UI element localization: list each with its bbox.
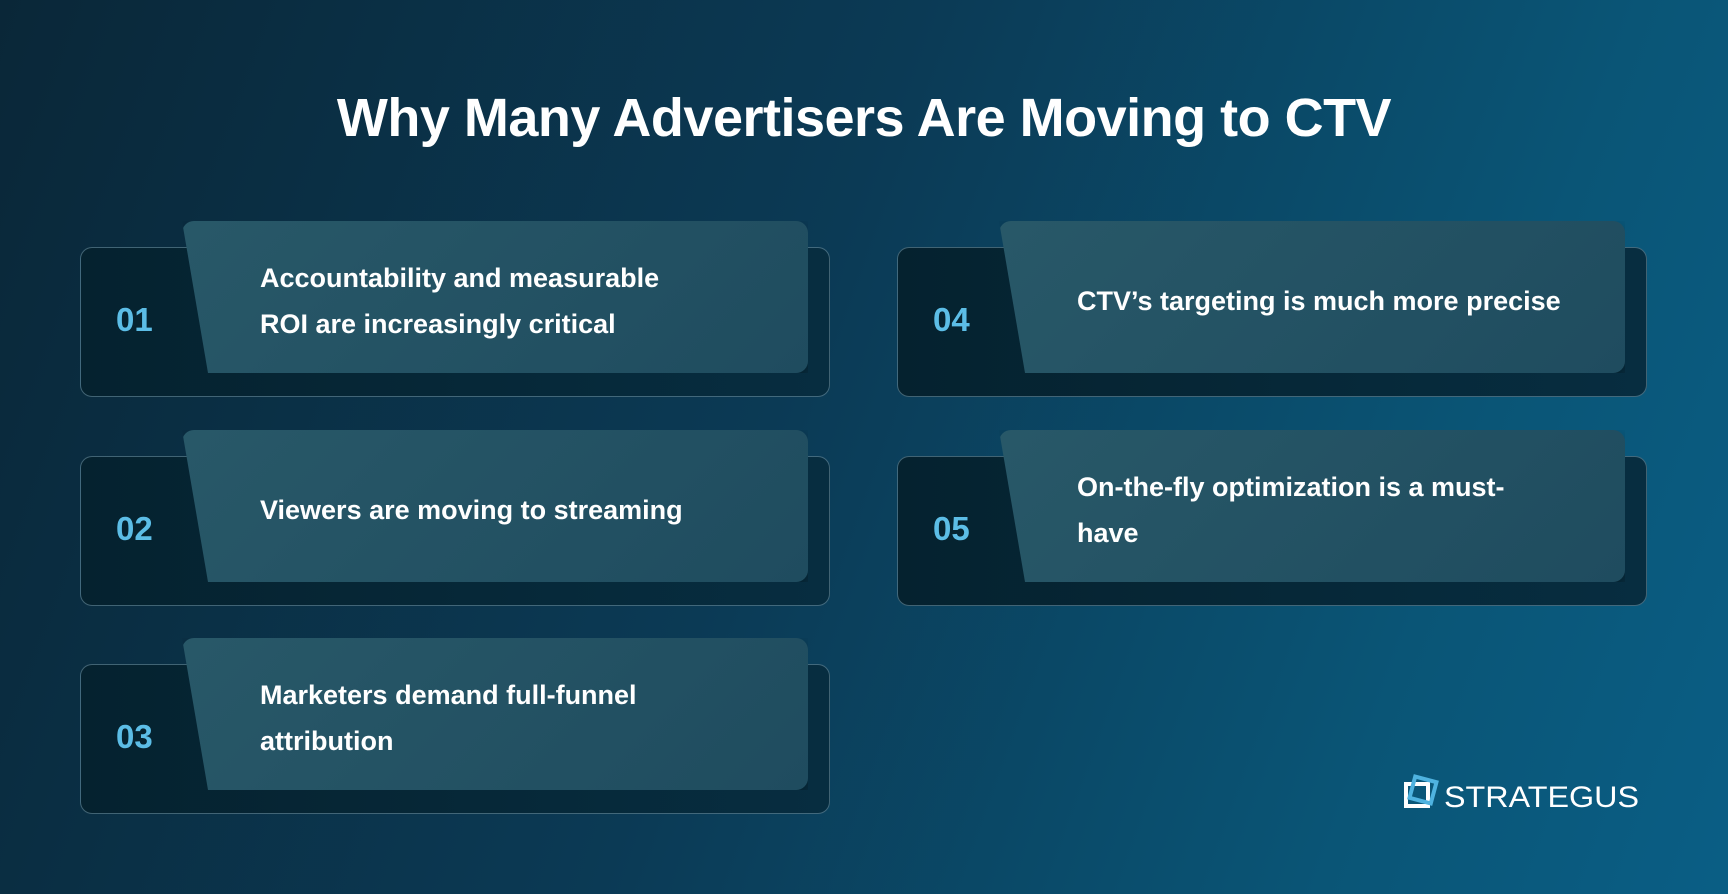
card 04: 04 xyxy=(933,301,970,338)
card 04 xyxy=(897,221,1647,397)
card 01: ROI are increasingly critical xyxy=(260,309,616,339)
title: Why Many Advertisers Are Moving to CTV xyxy=(337,88,1391,148)
card 05: have xyxy=(1077,518,1139,548)
logo: STRATEGUS xyxy=(1444,781,1639,814)
card 05: On-the-fly optimization is a must- xyxy=(1077,472,1505,502)
card 03: attribution xyxy=(260,726,393,756)
card 05: 05 xyxy=(933,510,970,547)
card 02: 02 xyxy=(116,510,153,547)
card 04: CTV’s targeting is much more precise xyxy=(1077,286,1561,316)
logo xyxy=(1404,774,1639,814)
card 01: 01 xyxy=(116,301,153,338)
card 01: Accountability and measurable xyxy=(260,263,659,293)
card 02 xyxy=(80,430,830,606)
card 03: Marketers demand full-funnel xyxy=(260,680,637,710)
card 03 xyxy=(80,638,830,814)
card 03: 03 xyxy=(116,718,153,755)
card 05 xyxy=(897,430,1647,606)
card 02: Viewers are moving to streaming xyxy=(260,495,683,525)
card 01 xyxy=(80,221,830,397)
